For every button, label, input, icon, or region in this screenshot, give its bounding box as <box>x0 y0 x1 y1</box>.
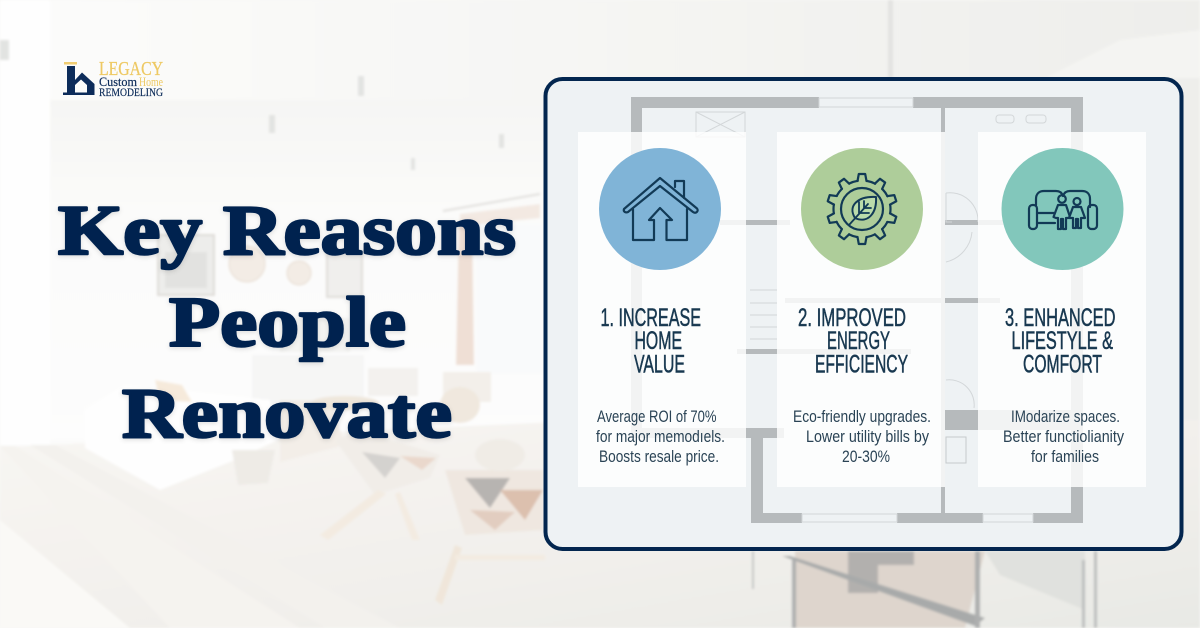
text: increase home value details: Boosts resale price. <box>599 447 719 466</box>
heading: enhanced lifestyle and comfort: LIFESTYLE & <box>1012 327 1113 355</box>
icon: house <box>599 148 721 270</box>
track lights <box>0 40 504 170</box>
text: enhanced lifestyle and comfort details: for families <box>1031 447 1099 466</box>
text: enhanced lifestyle and comfort details: IModarize spaces. <box>1011 407 1120 426</box>
basket and side table <box>232 450 275 485</box>
card 3 <box>978 132 1146 487</box>
logo wordmark: REMODELING <box>99 85 163 99</box>
logo wordmark: LEGACY <box>99 58 163 80</box>
panel: reasons <box>546 79 1182 549</box>
card 2 <box>777 132 945 487</box>
dining chairs below panel <box>752 551 1097 628</box>
card 1 <box>578 132 746 487</box>
text: improved energy efficiency details: Lower utility bills by <box>806 427 929 446</box>
text: increase home value details: for major memodıels. <box>596 427 725 446</box>
heading: increase home value: VALUE <box>634 350 685 378</box>
curtain rod and curtains <box>443 193 540 212</box>
heading: increase home value: HOME <box>634 327 682 355</box>
logo <box>63 58 163 99</box>
tv console <box>252 355 364 405</box>
heading: enhanced lifestyle and comfort <box>1005 304 1116 378</box>
text: improved energy efficiency details <box>793 407 931 466</box>
text: increase home value details: Average ROI of 70% <box>597 407 716 426</box>
heading: enhanced lifestyle and comfort: COMFORT <box>1023 350 1102 378</box>
icon: family on sofa <box>1002 148 1124 270</box>
text: improved energy efficiency details: 20-30% <box>842 447 890 466</box>
logo wordmark: Custom <box>99 75 137 89</box>
wall frames and clocks <box>158 235 214 295</box>
text: improved energy efficiency details: Eco-friendly upgrades. <box>793 407 931 426</box>
heading: enhanced lifestyle and comfort: 3. ENHANCED <box>1005 304 1116 332</box>
text: increase home value details <box>596 407 725 466</box>
lounge furniture <box>368 368 418 396</box>
heading: increase home value: 1. INCREASE <box>600 304 701 332</box>
logo wordmark <box>99 58 163 99</box>
heading: improved energy efficiency <box>798 304 908 378</box>
heading: improved energy efficiency: EFFICIENCY <box>815 350 908 378</box>
heading: improved energy efficiency: 2. IMPROVED <box>798 304 906 332</box>
logo mark: pillar and house <box>63 62 94 95</box>
text: enhanced lifestyle and comfort details: Better functiolianity <box>1003 427 1124 446</box>
floor plan backdrop <box>631 97 1083 523</box>
title: Renovate <box>122 375 452 453</box>
patterned chairs <box>320 430 545 605</box>
title: Key Reasons <box>58 192 516 270</box>
title <box>58 192 516 453</box>
sofa <box>85 385 278 490</box>
text: enhanced lifestyle and comfort details <box>1003 407 1124 466</box>
icon: gear with leaf <box>801 148 923 270</box>
title: People <box>169 284 406 362</box>
heading: increase home value <box>600 304 701 378</box>
heading: improved energy efficiency: ENERGY <box>827 327 890 355</box>
logo wordmark: Home <box>139 75 163 89</box>
